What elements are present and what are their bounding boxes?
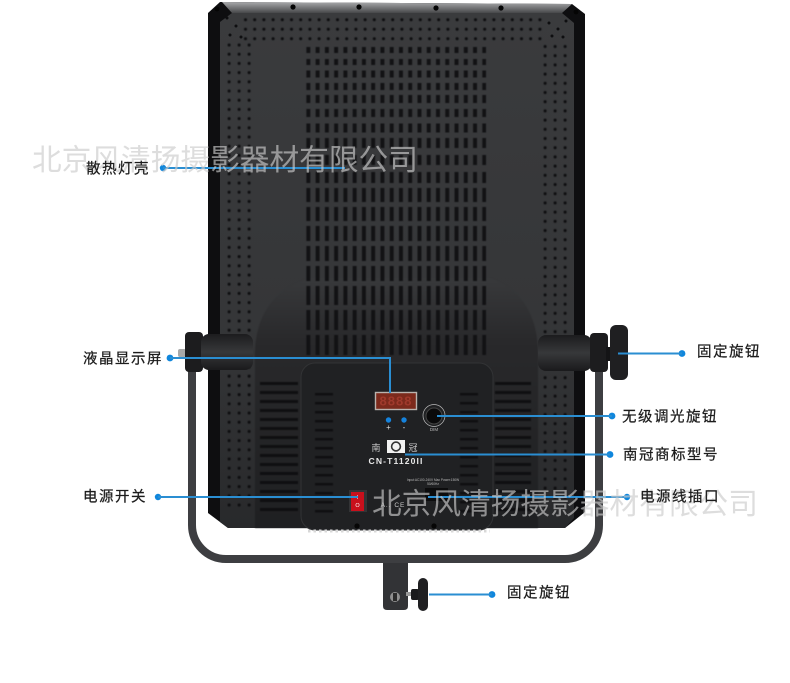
- spec text and socket: Input:AC100-240V Max Power:150W: [407, 478, 459, 482]
- label: logo and model: 南冠商标型号: [623, 446, 719, 464]
- plus and minus buttons: -: [403, 423, 406, 432]
- label: housing: 散热灯壳: [86, 160, 150, 178]
- label: right knob: 固定旋钮: [697, 344, 761, 360]
- control box: [301, 363, 493, 531]
- power switch: [349, 490, 367, 512]
- callout: power switch: [155, 494, 358, 500]
- callout: right knob: [618, 350, 685, 357]
- vent slots grid: [306, 50, 486, 345]
- brand logo and model: CN-T1120II: [369, 456, 423, 466]
- spec text and socket: [381, 478, 459, 509]
- dimmer knob: DIM: [430, 427, 438, 432]
- plus and minus buttons: +: [386, 423, 391, 432]
- yoke bracket: [192, 365, 599, 559]
- LED display: 8888: [380, 394, 412, 408]
- panel: heat-dissipating housing: [208, 2, 585, 528]
- watermark top: 北京风清扬摄影器材有限公司: [32, 144, 418, 177]
- left clamp: [178, 332, 253, 372]
- power switch: O: [355, 503, 360, 509]
- callout: display: [167, 355, 390, 393]
- label: dimmer: 无级调光旋钮: [622, 408, 718, 426]
- callout: bottom knob: [429, 591, 495, 598]
- brand logo and model: [369, 440, 423, 466]
- callout: power socket: [428, 494, 630, 500]
- plus and minus buttons: [386, 417, 407, 432]
- callout: logo and model: [405, 451, 613, 458]
- brand logo and model: 冠: [408, 443, 418, 453]
- label: bottom knob: 固定旋钮: [507, 584, 571, 602]
- spec text and socket: 50/60Hz: [427, 482, 439, 486]
- label: display: 液晶显示屏: [83, 350, 163, 368]
- label: power socket: 电源线插口: [640, 488, 720, 506]
- watermark bottom: 北京风清扬摄影器材有限公司: [372, 488, 758, 521]
- bottom mount with knob: [383, 563, 428, 611]
- rear hump housing: [255, 278, 538, 528]
- callout: housing: [160, 165, 345, 171]
- brand logo and model: 南: [371, 442, 381, 453]
- side vent slats: [260, 381, 531, 516]
- callout: dimmer: [437, 413, 615, 419]
- right clamp with knob: [538, 325, 628, 380]
- power switch: I: [357, 495, 358, 501]
- dimmer knob: [423, 404, 445, 432]
- label: power switch: 电源开关: [83, 488, 147, 506]
- spec text and socket: A.. CE: [381, 502, 405, 509]
